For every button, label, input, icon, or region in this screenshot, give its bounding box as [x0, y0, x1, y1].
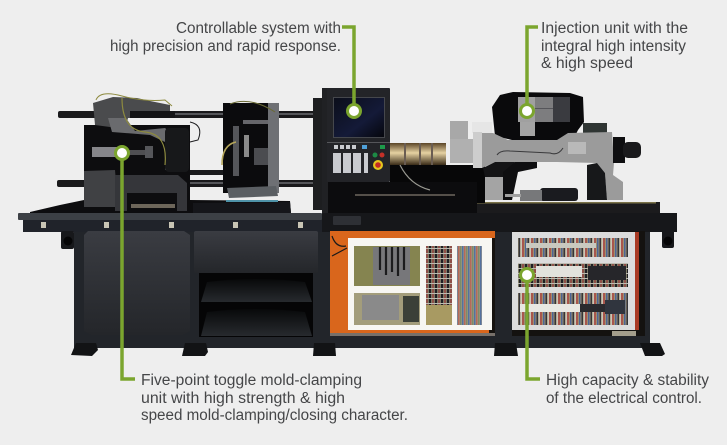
electrical cabinet left — [330, 231, 495, 336]
text: injection unit: & high speed — [541, 55, 633, 72]
clamping unit — [30, 94, 323, 213]
text: mold clamping: speed mold-clamping/closing character. — [141, 407, 408, 424]
text: electrical control: High capacity & stability — [546, 372, 709, 389]
control panel — [322, 88, 390, 213]
callout: mold clamping — [116, 146, 408, 424]
feet — [71, 343, 665, 356]
marker: mold clamping — [116, 146, 128, 160]
machine illustration — [18, 88, 677, 356]
text: mold clamping: unit with high strength & high — [141, 390, 345, 407]
leader line: injection unit — [527, 27, 538, 111]
marker: electrical control — [520, 268, 534, 282]
callout: control system — [110, 20, 360, 118]
base frame — [18, 213, 677, 348]
text: control system: high precision and rapid response. — [110, 38, 341, 55]
marker: control system — [348, 104, 360, 118]
leader line: mold clamping — [122, 153, 135, 379]
leader line: electrical control — [527, 275, 540, 379]
text: injection unit: integral high intensity — [541, 38, 686, 55]
electrical cabinet right — [512, 231, 645, 336]
cabinet doors — [84, 231, 318, 337]
text: injection unit: Injection unit with the — [541, 20, 688, 37]
callout: injection unit — [520, 20, 688, 118]
marker: injection unit — [520, 104, 534, 118]
callout: electrical control — [520, 268, 709, 407]
leader line: control system — [342, 27, 354, 111]
injection unit — [323, 92, 660, 213]
text: control system: Controllable system with — [176, 20, 341, 37]
text: electrical control: of the electrical control. — [546, 390, 702, 407]
text: mold clamping: Five-point toggle mold-clamping — [141, 372, 362, 389]
